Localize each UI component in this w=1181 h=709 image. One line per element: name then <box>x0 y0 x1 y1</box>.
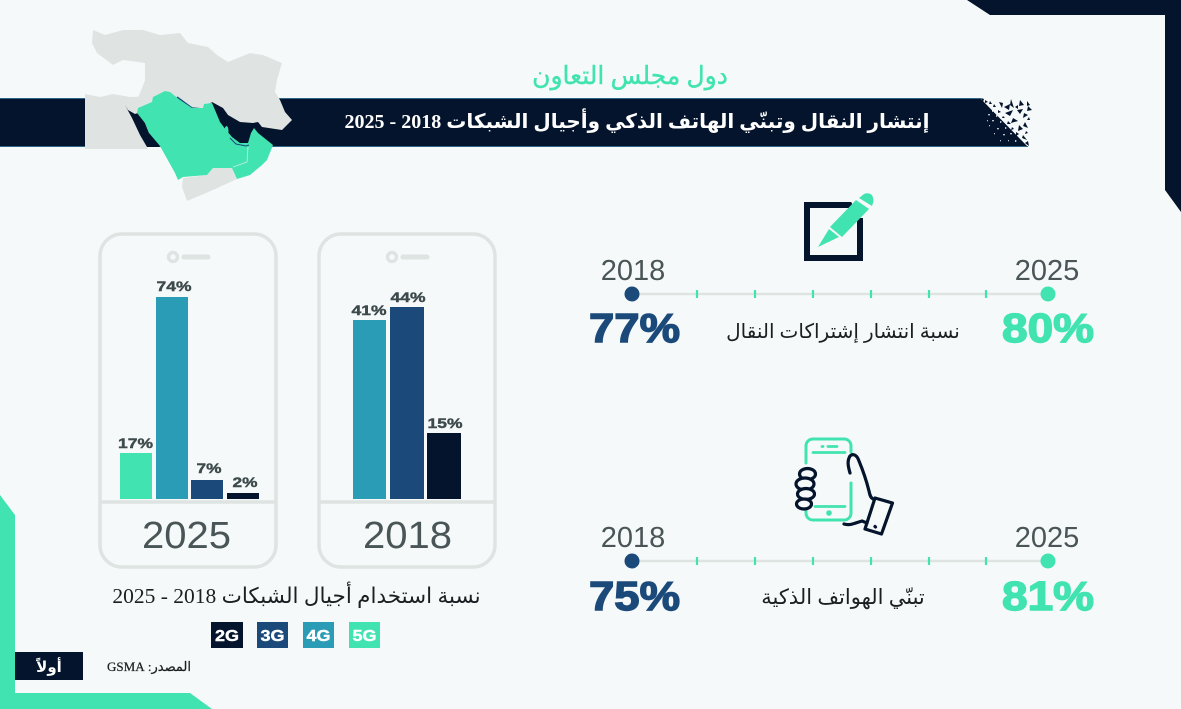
year 2025: 2025 <box>142 515 231 557</box>
timeline <box>624 554 1056 568</box>
brand tag: أولاً <box>35 657 62 676</box>
map: UAE coastal edge <box>230 138 249 146</box>
map: Egypt and Sinai <box>85 94 153 149</box>
map: Iraq-Kuwait coast edge <box>177 97 212 109</box>
map: Yemen <box>182 168 237 201</box>
value labels: 7% <box>196 460 222 476</box>
map: Turkey, Levant, Iraq and Iran <box>92 30 292 130</box>
map: Qatar <box>224 126 228 136</box>
year label 2018: 2018 <box>601 522 665 554</box>
value labels: 44% <box>390 289 426 305</box>
source: المصدر: GSMA <box>107 659 191 675</box>
value 75%: 75% <box>589 573 680 619</box>
top-right corner frame <box>967 0 1181 212</box>
timeline <box>624 286 1056 302</box>
value labels: 41% <box>352 302 387 318</box>
brand tag <box>15 652 83 680</box>
year label 2025: 2025 <box>1015 522 1079 554</box>
value labels: 2% <box>232 474 258 490</box>
bar 2G <box>427 433 461 499</box>
bottom-left corner frame <box>0 495 212 709</box>
year label 2025: 2025 <box>1015 255 1079 287</box>
label: تبنّي الهواتف الذكية <box>761 585 925 609</box>
value 77%: 77% <box>589 305 680 351</box>
legend 4G: 4G <box>306 628 330 645</box>
panel: subscriber penetration <box>589 193 1094 351</box>
value labels: 74% <box>156 278 192 294</box>
legend 3G: 3G <box>260 628 284 645</box>
legend 5G <box>349 622 380 648</box>
bar 4G <box>353 320 386 499</box>
legend 3G <box>257 622 288 648</box>
label: نسبة انتشار إشتراكات النقال <box>726 321 960 344</box>
year label 2018: 2018 <box>601 255 665 287</box>
bar 4G <box>156 297 188 499</box>
map: Saudi Arabia, UAE and Oman <box>137 91 273 180</box>
heading: GCC: دول مجلس التعاون <box>532 63 728 91</box>
title text: إنتشار النقال وتبنّي الهاتف الذكي وأجيال الشبكات 2018 - 2025 <box>345 107 929 134</box>
icon: hand holding phone <box>796 439 892 534</box>
bar 3G <box>390 307 424 499</box>
legend 2G <box>211 622 243 648</box>
legend 4G <box>303 622 334 648</box>
bar 2G <box>227 493 259 499</box>
phone outline <box>100 234 276 567</box>
map: Red Sea <box>125 105 160 147</box>
value labels <box>118 278 258 490</box>
icon: pencil and box <box>807 193 873 258</box>
chart: 2025 phone <box>100 234 276 567</box>
value labels: 15% <box>428 415 463 431</box>
bar 3G <box>191 480 223 499</box>
phone outline <box>319 234 495 567</box>
map: Middle East with GCC highlighted <box>85 30 292 201</box>
chart: 2018 phone <box>319 234 495 567</box>
bar 5G <box>120 453 152 499</box>
value labels: 17% <box>118 435 154 451</box>
panel: smartphone adoption <box>589 439 1094 619</box>
value labels <box>352 289 463 431</box>
legend 5G: 5G <box>352 628 376 645</box>
title banner <box>0 98 1032 147</box>
value 80%: 80% <box>1002 305 1094 351</box>
year 2018: 2018 <box>363 515 452 557</box>
map: UAE-Oman border <box>233 147 248 167</box>
legend <box>211 622 380 648</box>
value 81%: 81% <box>1002 573 1094 619</box>
chart caption: نسبة استخدام أجيال الشبكات 2018 - 2025 <box>112 581 481 608</box>
legend 2G: 2G <box>215 628 239 645</box>
